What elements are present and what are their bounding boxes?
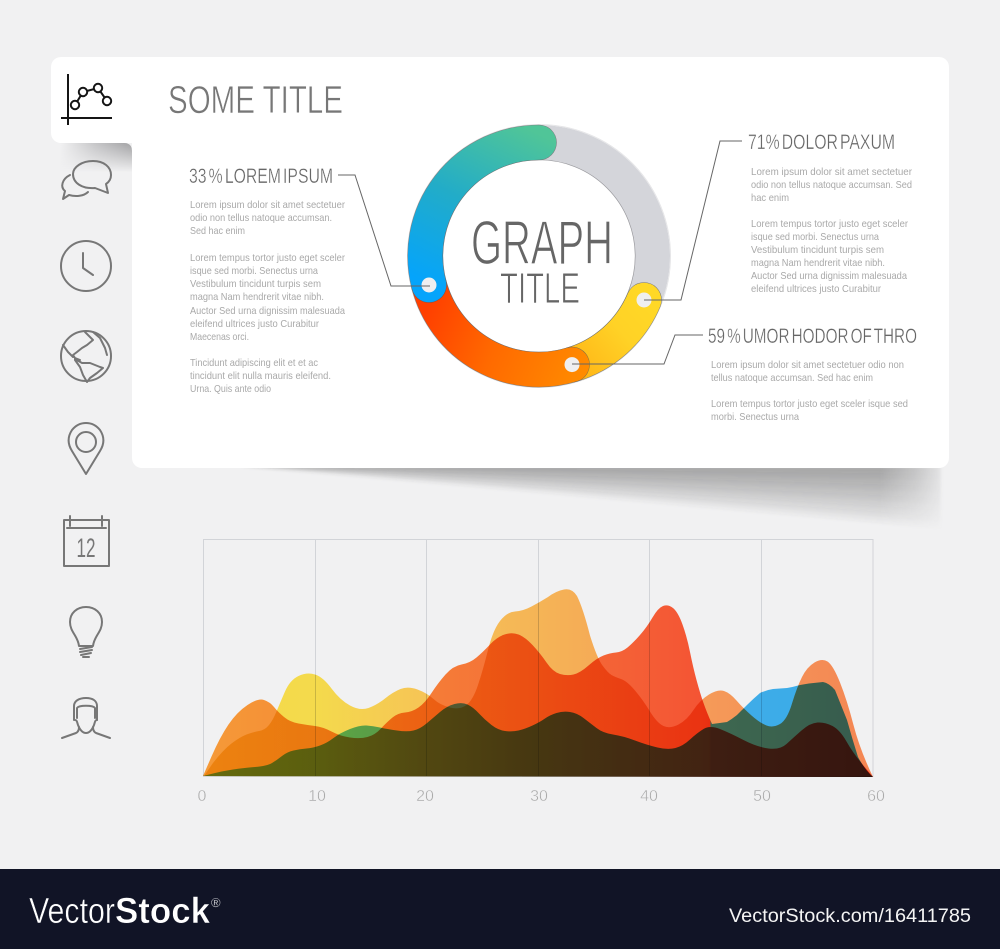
callout body: Lorem ipsum dolor sit amet sectetuer odio non (711, 359, 904, 371)
callout body: tincidunt elit nulla mauris eleifend. (190, 370, 331, 382)
callout body: Tincidunt adipiscing elit et et ac (190, 357, 318, 369)
icon: person (62, 698, 110, 738)
donut segment: blue green (425, 142, 539, 285)
icon: line chart (active tab) (61, 74, 112, 125)
area series: orange red blue (203, 605, 873, 777)
donut segment: orange red (429, 285, 572, 370)
callout body: tellus natoque accumsan. Sed hac enim (711, 372, 873, 384)
graph title (471, 209, 613, 313)
x axis labels: 20 (416, 788, 434, 805)
callout body (190, 199, 345, 395)
callout heading: 33 % LOREM IPSUM (189, 165, 333, 188)
callout body: Vestibulum tincidunt turpis sem (751, 244, 884, 256)
donut grey track (426, 142, 652, 370)
callout: 71 percent (748, 131, 912, 295)
donut segment: yellow (572, 300, 644, 365)
area series: teal red (203, 703, 873, 777)
callout body: Lorem tempus tortor justo eget sceler (751, 218, 908, 230)
footer logo: Stock (115, 890, 211, 931)
callout body (711, 359, 908, 423)
donut chart (408, 124, 670, 388)
graph title: GRAPH (471, 209, 613, 278)
x axis labels: 30 (530, 788, 548, 805)
callout body: isque sed morbi. Senectus urna (751, 231, 879, 243)
callout body: Auctor Sed urna dignissim malesuada (190, 305, 345, 317)
icon: globe (61, 331, 111, 382)
footer image id: VectorStock.com/16411785 (729, 906, 971, 927)
card drop shadow (252, 468, 940, 522)
callout body: Maecenas orci. (190, 331, 249, 343)
leader line: 59 percent (572, 335, 703, 364)
leader line: 71 percent (644, 141, 742, 300)
callout body: Auctor Sed urna dignissim malesuada (751, 270, 907, 282)
callout body: Lorem ipsum dolor sit amet sectetuer (751, 166, 912, 178)
callout body: odio non tellus natoque accumsan. Sed (751, 179, 912, 191)
callout heading: 59 % UMOR HODOR OF THRO (708, 325, 917, 348)
callout body: Lorem tempus tortor justo eget sceler (190, 252, 345, 264)
callout body: hac enim (751, 192, 789, 204)
callout body: Sed hac enim (190, 225, 245, 237)
icon: light bulb (70, 607, 102, 657)
icon: map pin (69, 423, 103, 474)
callout: 59 percent (708, 325, 917, 423)
callout body: isque sed morbi. Senectus urna (190, 265, 318, 277)
icon: chat bubbles (62, 161, 111, 199)
footer logo: ® (211, 895, 221, 910)
callout body: magna Nam hendrerit vitae nibh. (190, 291, 324, 303)
area series: yellow orange (204, 589, 873, 777)
callout body: Lorem ipsum dolor sit amet sectetuer (190, 199, 345, 211)
callout: 33 percent (189, 165, 345, 395)
x axis labels: 10 (308, 788, 326, 805)
chart frame and grid (204, 540, 873, 776)
icon: clock (61, 241, 111, 291)
area chart (203, 540, 873, 777)
callout body: morbi. Senectus urna (711, 411, 799, 423)
donut anchor dots (422, 278, 652, 372)
icon: calendar (64, 516, 109, 566)
footer logo: Vector (29, 890, 115, 931)
callout body: eleifend ultrices justo Curabitur (751, 283, 881, 295)
callout body: odio non tellus natoque accumsan. (190, 212, 332, 224)
callout heading: 71% DOLOR PAXUM (748, 131, 895, 154)
x axis labels: 60 (867, 788, 885, 805)
title: SOME TITLE (168, 79, 343, 122)
footer logo (29, 890, 221, 931)
icon: calendar: 12 (76, 533, 96, 563)
x axis labels: 40 (640, 788, 658, 805)
x axis labels: 50 (753, 788, 771, 805)
footer bar (0, 869, 1000, 949)
x axis labels (198, 788, 885, 805)
callout body: magna Nam hendrerit vitae nibh. (751, 257, 885, 269)
panel: white card with active tab (51, 57, 949, 468)
callout body: eleifend ultrices justo Curabitur (190, 318, 319, 330)
callout body: Lorem tempus tortor justo eget sceler isque sed (711, 398, 908, 410)
callout body: Vestibulum tincidunt turpis sem (190, 278, 321, 290)
callout body (751, 166, 912, 295)
callout body: Urna. Quis ante odio (190, 383, 271, 395)
leader line: 33 percent (338, 175, 430, 286)
x axis labels: 0 (198, 788, 207, 805)
graph title: TITLE (500, 264, 580, 313)
tab fold shadow (67, 143, 132, 169)
